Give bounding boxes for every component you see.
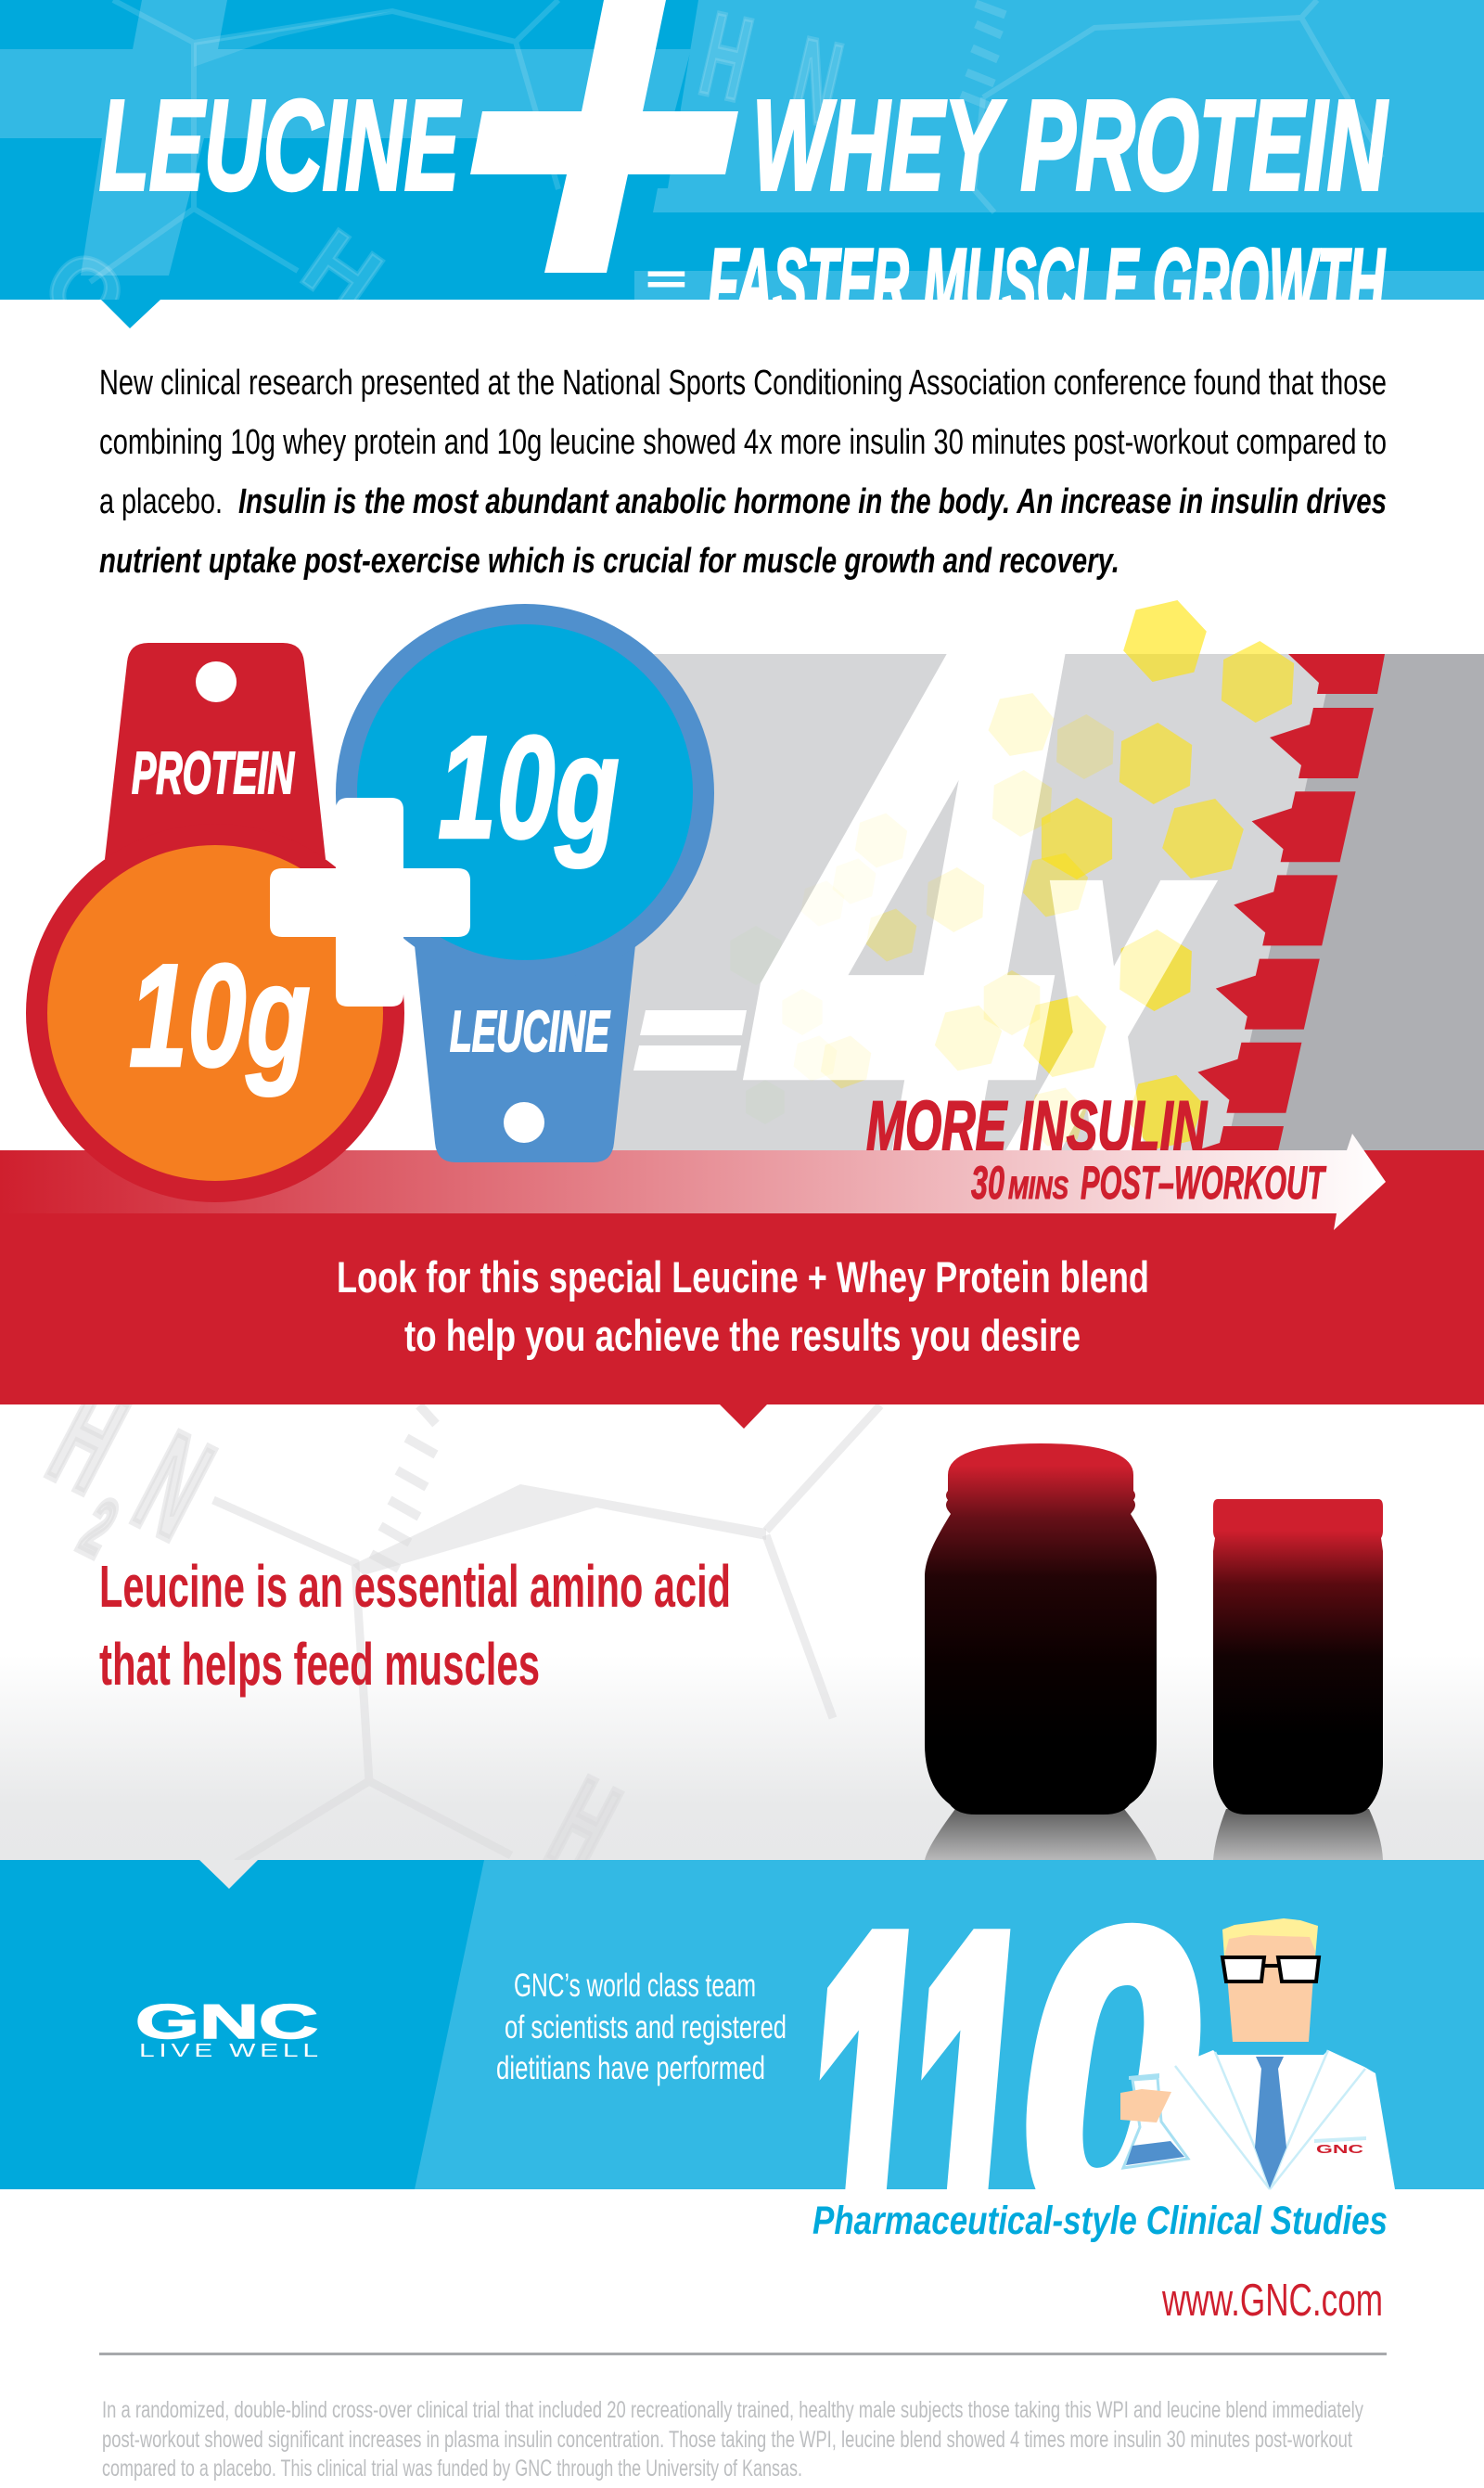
red band pointer [720,1404,767,1429]
GNC logo: GNC [135,1995,318,2049]
background molecule: 2 [68,1482,130,1572]
website: www.GNC.com [1161,2276,1383,2326]
icon: large bottle [925,1443,1157,1860]
icon: small bottle [1213,1499,1383,1860]
red band call to action: Look for this special Leucine + Whey Protein blend [337,1252,1149,1302]
icon: red protein scoop [26,643,404,1202]
hair [1222,1918,1318,1957]
leucine 10g: 10g [438,706,620,869]
big 4x figure: 4 [731,466,1081,1346]
pale hexagons over the 4x [782,684,1209,1160]
flask [1123,2073,1188,2168]
panel: leucine essential amino acid [0,1404,1484,1860]
header subtitle [647,247,1387,300]
more insulin label: MORE INSULIN [866,1087,1208,1166]
panel: clinical studies [0,1860,1484,2190]
GNC logo [135,1995,318,2061]
leucine heading [99,1553,731,1698]
background molecule: N [114,1403,234,1569]
red band [0,1150,1484,1404]
GNC logo: LIVE WELL [139,2041,318,2061]
icon: white plus [270,798,470,1007]
scientists text: GNC’s world class team [514,1968,756,2004]
leucine label: LEUCINE [450,1000,610,1064]
intro paragraph: nutrient uptake post-exercise which is crucial for muscle growth and recovery. [99,542,1119,581]
pocket badge [1314,2136,1366,2143]
header pointer [101,300,160,328]
footnote [102,2397,1363,2482]
scientists text: dietitians have performed [496,2050,765,2086]
header background bands [0,0,1484,300]
scientists text: of scientists and registered [505,2009,787,2046]
leucine heading: that helps feed muscles [99,1631,540,1698]
red band call to action: to help you achieve the results you desire [404,1311,1081,1360]
intro paragraph: a placebo. [99,482,223,521]
equals sign [633,1010,747,1071]
protein label: PROTEIN [132,739,295,806]
face [1225,1935,1315,2042]
header background bands: N [780,12,852,151]
gradient arrow [0,1134,1386,1230]
background molecule: H [530,1751,637,1901]
post-workout label [971,1157,1327,1209]
tie [1255,2057,1286,2188]
post-workout label: 30 [971,1157,1004,1209]
panel: header [0,0,1484,300]
post-workout label: POST–WORKOUT [1081,1157,1327,1209]
hand [1120,2089,1171,2122]
section pointer [199,1860,258,1889]
header icon: large plus [470,0,738,273]
header background bands: H [285,210,400,333]
big number 110 [820,1922,1200,2189]
background molecule [29,1356,880,1901]
insulin hexagons [730,589,1295,1160]
scientists text [496,1968,787,2086]
intro paragraph [99,364,1387,581]
protein 10g: 10g [129,934,311,1097]
post-workout label: MINS [1008,1171,1068,1206]
footnote: compared to a placebo. This clinical trial was funded by GNC through the University of Kansas. [102,2456,802,2482]
big number 110: 11 [805,1839,1024,2378]
icon: scientist [1120,1918,1395,2189]
background molecule: H [29,1356,148,1522]
panel: hero 4x more insulin [464,466,1484,1346]
insulin receptor comb [1198,654,1385,1150]
header subtitle: = [645,257,685,301]
header title: leucine: LEUCINE [99,74,462,217]
big 4x figure: x [978,681,1230,1307]
dark blue logo area [0,1860,484,2189]
header background bands: O [25,228,144,355]
lab coat [1150,2050,1395,2189]
red band call to action [337,1252,1149,1360]
big number 110: 0 [1020,1849,1196,2304]
leucine heading: Leucine is an essential amino acid [99,1553,731,1620]
glasses [1222,1957,1319,1981]
big 4x figure [743,654,1218,1150]
icon: blue leucine scoop [336,604,714,1162]
icon: scientist: GNC [1316,2142,1364,2156]
